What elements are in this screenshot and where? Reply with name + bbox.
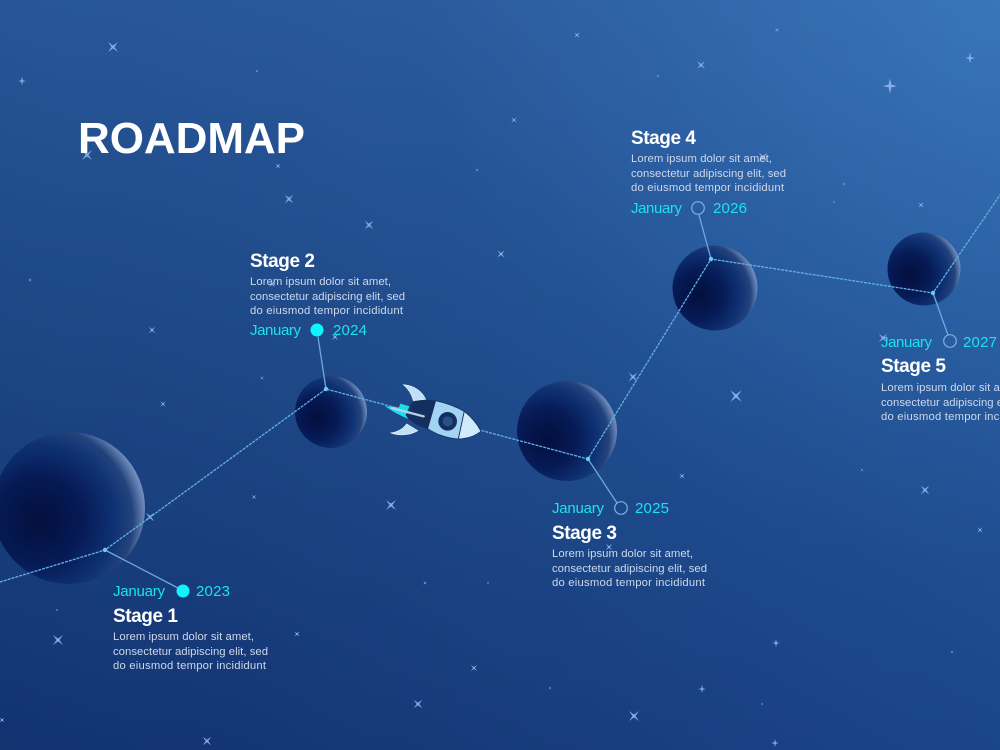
stage 3 text <box>552 548 707 589</box>
stage 5 date: 2027 <box>963 334 997 351</box>
stage 2 date: January <box>250 322 302 339</box>
stage 2 heading: Stage 2 <box>250 251 315 272</box>
icon: rocket <box>385 385 481 439</box>
stage 2 text: do eiusmod tempor incididunt <box>250 305 404 317</box>
dashed route line <box>0 192 1000 582</box>
stage 3 date: 2025 <box>635 500 669 517</box>
stage 4 text: Lorem ipsum dolor sit amet, <box>631 153 772 165</box>
stage 5 date: January <box>881 334 932 351</box>
planet 1 <box>0 432 145 584</box>
stage 3 block <box>552 500 707 589</box>
title: ROADMAP <box>78 114 305 163</box>
stage 1 block <box>113 583 268 672</box>
stage 4 heading: Stage 4 <box>631 128 696 149</box>
stage 1 date: January <box>113 583 166 600</box>
stage 1 text: consectetur adipiscing elit, sed <box>113 646 268 658</box>
stage 1 text: do eiusmod tempor incididunt <box>113 660 267 672</box>
stage 1 text: Lorem ipsum dolor sit amet, <box>113 631 254 643</box>
stage 3 heading: Stage 3 <box>552 523 617 544</box>
stage 4 text: consectetur adipiscing elit, sed <box>631 168 786 180</box>
stage 4 date <box>631 200 747 217</box>
stage 5 date <box>881 334 997 351</box>
stage 4 block <box>631 128 786 217</box>
planet 2 <box>295 376 367 448</box>
stage 2 text: consectetur adipiscing elit, sed <box>250 291 405 303</box>
stage 2 text: Lorem ipsum dolor sit amet, <box>250 276 391 288</box>
stage 1 heading: Stage 1 <box>113 606 178 627</box>
planet 5 <box>888 232 960 306</box>
stage 2 text <box>250 276 405 317</box>
stage 4 date: January <box>631 200 682 217</box>
stage 3 text: consectetur adipiscing elit, sed <box>552 563 707 575</box>
stage 2 date: 2024 <box>333 322 367 339</box>
stage 5 text <box>881 382 1000 423</box>
stage 3 date <box>552 500 669 517</box>
stage 1 text <box>113 631 268 672</box>
stage 4 date: 2026 <box>713 200 747 217</box>
planet 3 <box>517 381 617 481</box>
stage 4 text: do eiusmod tempor incididunt <box>631 182 785 194</box>
stage 3 date: January <box>552 500 604 517</box>
stage 3 text: Lorem ipsum dolor sit amet, <box>552 548 693 560</box>
planet 4 <box>672 246 758 330</box>
stage 3 text: do eiusmod tempor incididunt <box>552 577 706 589</box>
stage 1 date: 2023 <box>196 583 230 600</box>
stage 4 text <box>631 153 786 194</box>
stage 5 block <box>881 334 1000 423</box>
stage 2 date <box>250 322 367 339</box>
stage connector lines and route nodes <box>103 215 948 588</box>
stage 5 heading: Stage 5 <box>881 356 946 377</box>
stage 1 date <box>113 583 230 600</box>
stage 2 block <box>250 251 405 339</box>
